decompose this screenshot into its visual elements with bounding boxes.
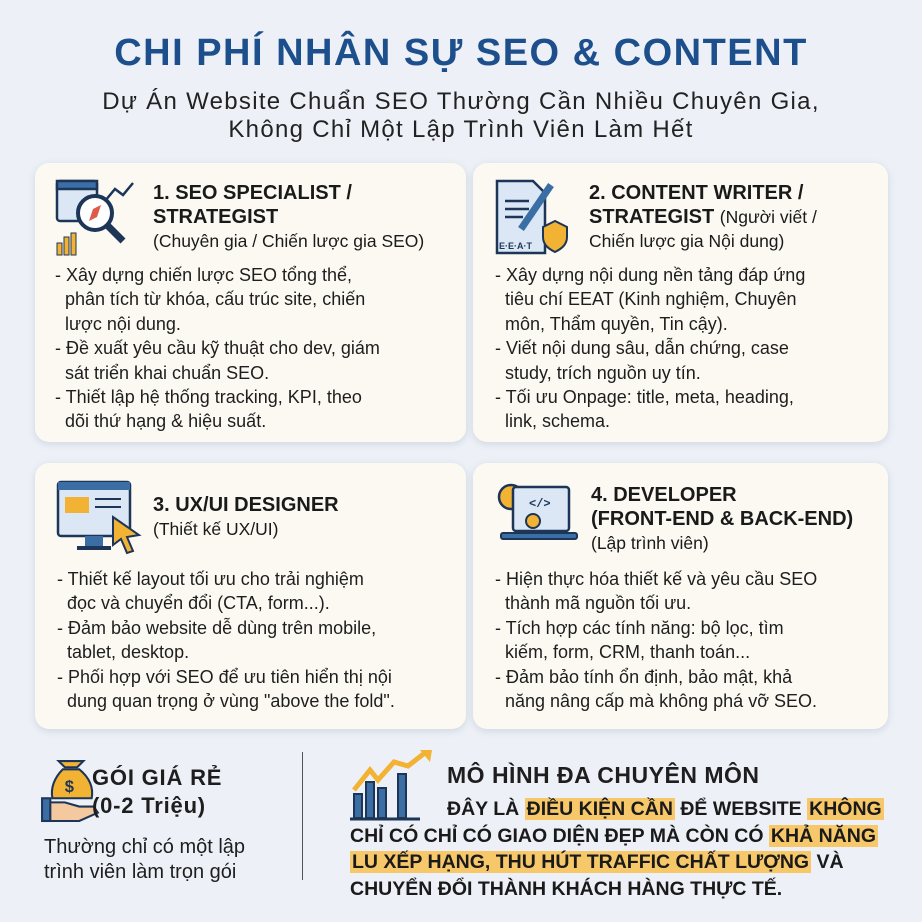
icon: document eeat bbox=[496, 180, 568, 254]
panel: content writer bbox=[473, 163, 888, 442]
bullets: năng nâng cấp mà không phá vỡ SEO. bbox=[505, 691, 817, 711]
bullets: kiếm, form, CRM, thanh toán... bbox=[505, 642, 750, 662]
heading: 2. CONTENT WRITER / bbox=[589, 182, 803, 204]
bullets: dung quan trọng ở vùng "above the fold". bbox=[67, 691, 395, 711]
text: cheap package desc bbox=[44, 836, 245, 883]
heading: (Thiết kế UX/UI) bbox=[153, 519, 278, 539]
bullets: sát triển khai chuẩn SEO. bbox=[65, 363, 269, 383]
subtitle: Dự Án Website Chuẩn SEO Thường Cần Nhiều Chuyên Gia, bbox=[102, 88, 820, 115]
bullets: - Thiết lập hệ thống tracking, KPI, theo bbox=[55, 387, 362, 407]
text: multi-expert description: CHỈ CÓ CHỈ CÓ GIAO DIỆN ĐẸP MÀ CÒN CÓ KHẢ NĂNG bbox=[350, 824, 876, 846]
text: multi-expert description: CHUYỂN ĐỔI THÀNH KHÁCH HÀNG THỰC TẾ. bbox=[350, 878, 782, 900]
text: cheap package desc: trình viên làm trọn gói bbox=[44, 861, 236, 883]
bullets: - Tích hợp các tính năng: bộ lọc, tìm bbox=[495, 618, 784, 638]
title: CHI PHÍ NHÂN SỰ SEO & CONTENT bbox=[114, 32, 808, 74]
bullets bbox=[57, 569, 395, 711]
text: multi-expert description: LU XẾP HẠNG, THU HÚT TRAFFIC CHẤT LƯỢNG VÀ bbox=[352, 851, 844, 873]
heading: Chiến lược gia Nội dung) bbox=[589, 231, 784, 251]
bullets: - Xây dựng chiến lược SEO tổng thể, bbox=[55, 265, 352, 285]
icon: laptop code: </> bbox=[529, 497, 551, 511]
heading: 3. UX/UI DESIGNER bbox=[153, 494, 339, 516]
panel: seo specialist bbox=[35, 163, 466, 442]
bullets: tablet, desktop. bbox=[67, 642, 189, 662]
subtitle bbox=[102, 88, 820, 143]
icon: growth chart bbox=[350, 750, 432, 820]
panel: developer bbox=[473, 463, 888, 729]
heading: (Lập trình viên) bbox=[591, 533, 709, 553]
bullets bbox=[495, 569, 817, 711]
icon: document eeat: E·E·A·T bbox=[499, 241, 532, 251]
bullets: - Đảm bảo tính ổn định, bảo mật, khả bbox=[495, 667, 792, 687]
icon: laptop code bbox=[498, 484, 578, 540]
bullets: study, trích nguồn uy tín. bbox=[505, 363, 701, 383]
heading: cheap package: (0-2 Triệu) bbox=[92, 793, 206, 818]
heading bbox=[589, 182, 817, 251]
bullets: - Phối hợp với SEO để ưu tiên hiển thị nội bbox=[57, 667, 392, 687]
heading bbox=[153, 182, 424, 251]
bullets: - Viết nội dung sâu, dẫn chứng, case bbox=[495, 338, 789, 358]
bullets: thành mã nguồn tối ưu. bbox=[505, 593, 691, 613]
text: cheap package desc: Thường chỉ có một lập bbox=[44, 836, 245, 858]
heading: multi-expert model: MÔ HÌNH ĐA CHUYÊN MÔN bbox=[447, 762, 759, 788]
bullets bbox=[495, 265, 805, 431]
bullets: tiêu chí EEAT (Kinh nghiệm, Chuyên bbox=[505, 289, 796, 309]
heading: 4. DEVELOPER bbox=[591, 484, 737, 506]
bullets: - Hiện thực hóa thiết kế và yêu cầu SEO bbox=[495, 569, 817, 589]
bullets: - Tối ưu Onpage: title, meta, heading, bbox=[495, 387, 794, 407]
bullets: phân tích từ khóa, cấu trúc site, chiến bbox=[65, 289, 365, 309]
text: multi-expert description bbox=[350, 797, 884, 900]
heading: STRATEGIST bbox=[153, 206, 278, 228]
bullets: - Xây dựng nội dung nền tảng đáp ứng bbox=[495, 265, 805, 285]
bullets: môn, Thẩm quyền, Tin cậy). bbox=[505, 314, 728, 334]
panel: ux/ui designer bbox=[35, 463, 466, 729]
icon: magnifier chart bbox=[56, 180, 134, 256]
bullets: - Đảm bảo website dễ dùng trên mobile, bbox=[57, 618, 376, 638]
bullets: - Thiết kế layout tối ưu cho trải nghiệm bbox=[57, 569, 364, 589]
heading: cheap package: GÓI GIÁ RẺ bbox=[92, 765, 222, 790]
icon: money bag bbox=[41, 760, 100, 822]
subtitle: Không Chỉ Một Lập Trình Viên Làm Hết bbox=[228, 116, 694, 143]
heading: cheap package bbox=[92, 765, 222, 818]
heading bbox=[591, 484, 853, 553]
bullets: link, schema. bbox=[505, 411, 610, 431]
heading bbox=[153, 494, 339, 539]
heading: 1. SEO SPECIALIST / bbox=[153, 182, 352, 204]
bullets: - Đề xuất yêu cầu kỹ thuật cho dev, giám bbox=[55, 338, 380, 358]
bullets bbox=[55, 265, 380, 431]
bullets: dõi thứ hạng & hiệu suất. bbox=[65, 411, 266, 431]
heading: (FRONT-END & BACK-END) bbox=[591, 508, 853, 530]
icon: money bag: $ bbox=[65, 777, 74, 796]
heading: (Chuyên gia / Chiến lược gia SEO) bbox=[153, 231, 424, 251]
icon: monitor cursor bbox=[56, 480, 142, 554]
bullets: lược nội dung. bbox=[65, 314, 181, 334]
bullets: đọc và chuyển đổi (CTA, form...). bbox=[67, 593, 330, 613]
heading: STRATEGIST (Người viết / bbox=[589, 206, 817, 228]
text: multi-expert description: ĐÂY LÀ ĐIỀU KIỆN CẦN ĐỂ WEBSITE KHÔNG bbox=[447, 798, 882, 820]
